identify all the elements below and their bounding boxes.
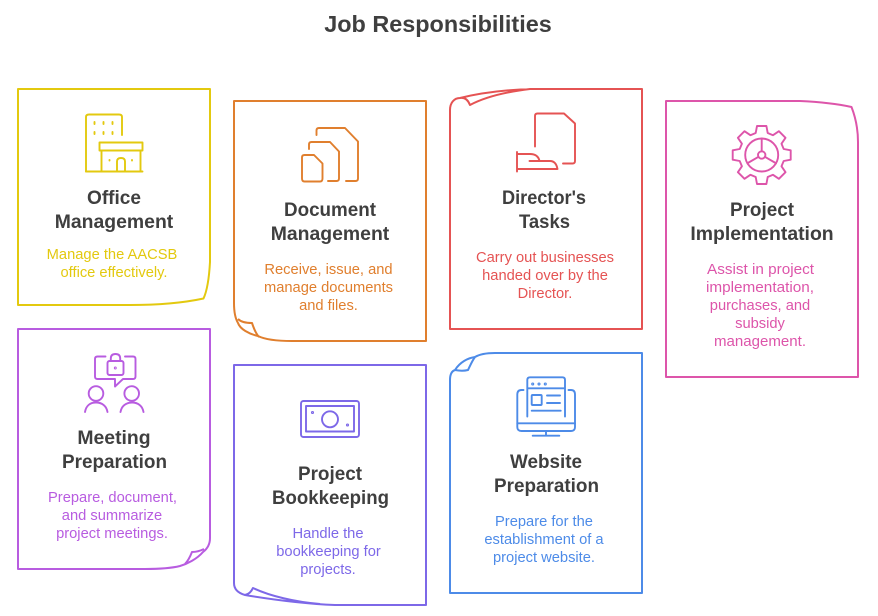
panel: project bookkeeping — [234, 365, 426, 605]
heading: document management: Document — [284, 199, 377, 221]
description: website preparation: establishment of a — [484, 532, 604, 548]
icon: documents — [302, 128, 358, 182]
panel outline: project implementation — [666, 101, 858, 377]
description: director's tasks: handed over by the — [482, 268, 608, 284]
description: document management: manage documents — [264, 280, 393, 296]
heading: website preparation: Website — [510, 451, 582, 473]
panel: office management — [18, 89, 210, 305]
panel: website preparation — [450, 353, 642, 593]
panel outline: document management — [234, 101, 426, 341]
heading: director's tasks: Director's — [502, 187, 586, 209]
description: document management: and files. — [299, 298, 358, 314]
description: project implementation: management. — [714, 334, 806, 350]
description: meeting preparation: project meetings. — [56, 526, 168, 542]
description: meeting preparation: Prepare, document, — [48, 490, 177, 506]
description: project implementation: implementation, — [706, 280, 814, 296]
icon: banknote — [301, 401, 359, 437]
panel outline: meeting preparation — [18, 329, 210, 569]
panel: document management — [234, 101, 426, 341]
description: office management: office effectively. — [61, 265, 167, 281]
description: meeting preparation: and summarize — [62, 508, 162, 524]
heading: office management: Management — [55, 211, 174, 233]
heading: meeting preparation: Preparation — [62, 451, 167, 473]
description: office management: Manage the AACSB — [47, 247, 178, 263]
description: project bookkeeping: projects. — [300, 562, 356, 578]
heading: project bookkeeping: Project — [298, 463, 363, 485]
description: document management: Receive, issue, and — [264, 262, 393, 278]
icon: website monitor — [517, 377, 575, 436]
heading: project implementation: Project — [730, 199, 795, 221]
icon: hand with document — [517, 114, 575, 172]
description: website preparation: Prepare for the — [495, 514, 593, 530]
heading: director's tasks: Tasks — [519, 211, 570, 233]
icon: gear — [733, 126, 791, 184]
panel: director's tasks — [450, 89, 642, 329]
panel outline: office management — [18, 89, 210, 305]
description: director's tasks: Carry out businesses — [476, 250, 614, 266]
icon: meeting lock — [85, 354, 144, 412]
description: website preparation: project website. — [493, 550, 595, 566]
panel outline: website preparation — [450, 353, 642, 593]
title: Job Responsibilities — [324, 11, 552, 37]
description: project bookkeeping: Handle the — [292, 526, 364, 542]
panel: project implementation — [666, 101, 858, 377]
description: project bookkeeping: bookkeeping for — [276, 544, 381, 560]
heading: document management: Management — [271, 223, 390, 245]
heading: project implementation: Implementation — [690, 223, 834, 245]
description: project implementation: purchases, and — [710, 298, 810, 314]
description: project implementation: subsidy — [735, 316, 786, 332]
icon: office building — [86, 114, 142, 172]
panel outline: project bookkeeping — [234, 365, 426, 605]
panel: meeting preparation — [18, 329, 210, 569]
panel outline: director's tasks — [450, 89, 642, 329]
heading: meeting preparation: Meeting — [77, 427, 151, 449]
description: project implementation: Assist in project — [707, 262, 814, 278]
heading: project bookkeeping: Bookkeeping — [272, 487, 389, 509]
heading: website preparation: Preparation — [494, 475, 599, 497]
description: director's tasks: Director. — [518, 286, 572, 302]
heading: office management: Office — [87, 187, 141, 209]
